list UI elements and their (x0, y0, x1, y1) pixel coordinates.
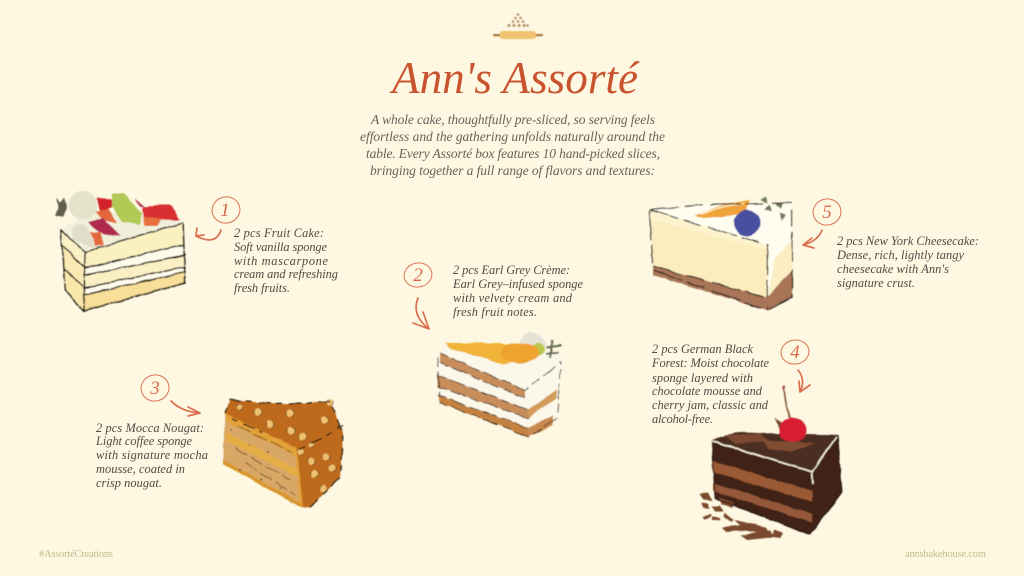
description 5: signature crust. (837, 276, 915, 290)
panel: earl grey creme (402, 260, 584, 437)
description 2 (452, 263, 584, 319)
arrow 1 (196, 228, 221, 240)
description 4: alcohol-free. (652, 412, 713, 426)
number 1 (210, 194, 242, 226)
number 4: 4 (790, 342, 800, 363)
arrow 3 (171, 401, 200, 416)
description 3: with signature mocha (96, 448, 208, 462)
illustration: black forest slice (700, 386, 842, 540)
description 1: fresh fruits. (234, 281, 290, 295)
intro text: effortless and the gathering unfolds naturally around the (360, 129, 665, 144)
description 1: Soft vanilla sponge (234, 240, 328, 254)
illustration: cheesecake slice (650, 196, 793, 310)
description 1: 2 pcs Fruit Cake: (234, 226, 324, 240)
description 3: 2 pcs Mocca Nougat: (96, 421, 204, 435)
number 5: 5 (822, 202, 832, 223)
description 2: Earl Grey–infused sponge (452, 277, 584, 291)
panel: german black forest (651, 338, 842, 540)
description 3: mousse, coated in (96, 462, 185, 476)
description 1: with mascarpone (234, 254, 328, 268)
description 4: chocolate mousse and (652, 384, 763, 398)
description 4: Forest: Moist chocolate (651, 356, 770, 370)
number 3: 3 (149, 378, 160, 399)
number 2: 2 (413, 265, 423, 286)
panel: mocca nougat (95, 372, 343, 508)
arrow 4 (798, 370, 810, 392)
panel: fruit cake (55, 190, 338, 311)
number 3 (139, 372, 171, 404)
number 4 (779, 338, 811, 366)
title: Ann's Assorté (389, 52, 641, 103)
number 2 (402, 260, 434, 290)
description 5: 2 pcs New York Cheesecake: (837, 234, 979, 248)
intro text: table. Every Assorté box features 10 hand-picked slices, (366, 146, 660, 161)
description 2: 2 pcs Earl Grey Crème: (453, 263, 570, 277)
panel: new york cheesecake (650, 196, 979, 310)
intro text: bringing together a full range of flavors and textures: (370, 163, 655, 178)
description 1 (234, 226, 338, 295)
description 5 (836, 234, 979, 290)
intro text: A whole cake, thoughtfully pre-sliced, so serving feels (370, 112, 655, 127)
number 1: 1 (220, 200, 230, 221)
footer website: annsbakehouse.com (905, 549, 986, 560)
intro text (360, 112, 665, 178)
description 5: Dense, rich, lightly tangy (836, 248, 964, 262)
number 5 (811, 196, 843, 228)
arrow 2 (413, 298, 429, 329)
description 4 (651, 342, 770, 426)
description 1: cream and refreshing (234, 267, 338, 281)
icon: rolling pin with flour dots (493, 13, 543, 39)
description 2: fresh fruit notes. (453, 305, 537, 319)
description 3 (95, 421, 208, 490)
description 3: Light coffee sponge (95, 434, 192, 448)
illustration: fruit cake slice (55, 190, 185, 311)
description 4: sponge layered with (652, 371, 753, 385)
description 2: with velvety cream and (453, 291, 573, 305)
arrow 5 (803, 230, 822, 248)
footer hashtag: #AssortéCreations (39, 549, 113, 560)
illustration: mocca nougat slice (223, 400, 343, 508)
description 3: crisp nougat. (96, 476, 162, 490)
description 5: cheesecake with Ann's (837, 262, 949, 276)
description 4: cherry jam, classic and (652, 398, 769, 412)
description 4: 2 pcs German Black (652, 342, 754, 356)
illustration: earl grey slice (438, 332, 563, 437)
